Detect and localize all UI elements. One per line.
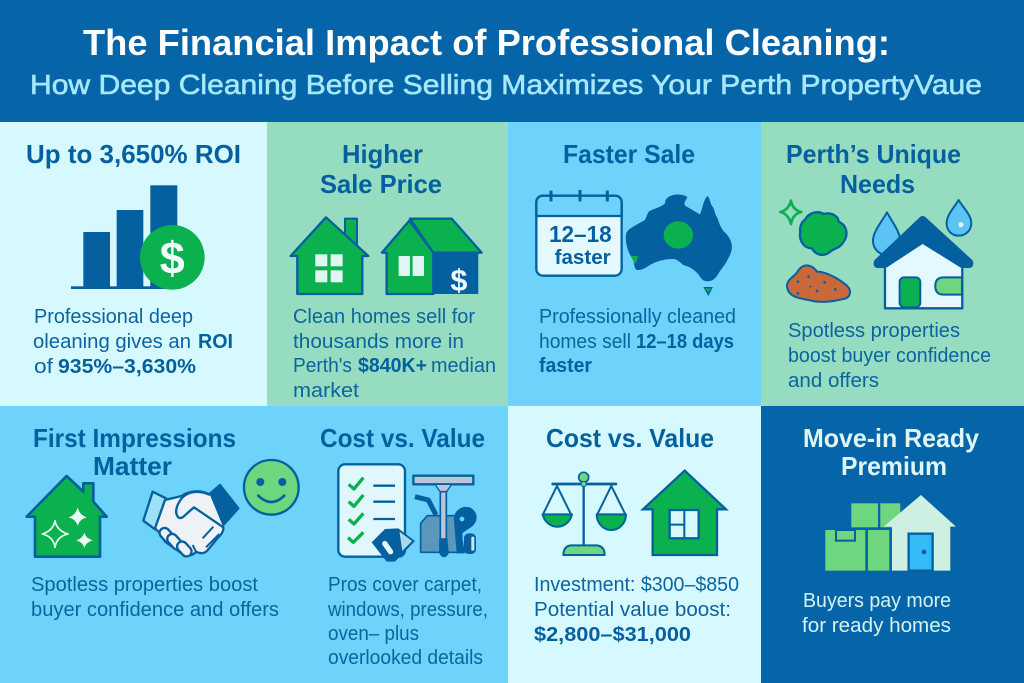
panel: ROI (0, 122, 267, 406)
panel: higher sale price (267, 122, 508, 406)
text: Perth's needs description (788, 320, 991, 392)
icon: checklist (338, 464, 415, 562)
text: faster sale description: 12–18 days (636, 331, 734, 353)
text: services description (327, 574, 488, 669)
heading: Perth's unique needs: Perth’s Unique (786, 139, 961, 169)
icon: bar chart with dollar coin (71, 185, 205, 290)
text: move-in description: Buyers pay more (803, 590, 951, 612)
icon: cleaning tools (413, 476, 476, 557)
panel: Perth's unique needs (761, 122, 1024, 406)
panel: faster sale (508, 122, 761, 406)
icon: sparkling green house (27, 476, 107, 557)
heading: Perth's unique needs (786, 139, 961, 199)
text: Perth's needs description: boost buyer confidence (788, 345, 991, 367)
heading: first impressions: Matter (93, 451, 172, 481)
text: ROI description (33, 306, 233, 378)
text: ROI description: 935%–3,630% (58, 356, 196, 378)
text: ROI description: of (34, 356, 53, 378)
text: services description: oven– plus (328, 623, 419, 645)
text: faster sale description (539, 306, 736, 377)
text: sale price description: median (431, 355, 496, 377)
text: investment description: $2,800–$31,000 (534, 624, 691, 646)
heading: Perth's unique needs: Needs (840, 169, 915, 199)
text: services description: overlooked details (328, 647, 483, 669)
text: sale price description: market (293, 380, 359, 402)
heading: cost vs value services: Cost vs. Value (320, 423, 485, 453)
icon: bar chart with dollar coin: $ (160, 232, 185, 283)
icon: house with water drops (873, 200, 971, 308)
text: investment description (534, 574, 739, 646)
header banner (0, 0, 1024, 122)
icon: handshake (143, 485, 238, 559)
text: first impressions description: Spotless properties boost (31, 574, 258, 596)
panel: cost vs value investment (508, 406, 761, 683)
heading: move-in ready premium: Move-in Ready (803, 423, 980, 453)
text: move-in description: for ready homes (802, 615, 951, 637)
icon: calendar (536, 190, 622, 276)
text: sale price description: $840K+ (358, 355, 427, 377)
icon: sparkle, bush and dirt pile (780, 201, 850, 302)
panel: first impressions and cost vs value (0, 406, 508, 683)
icon: two green houses (291, 217, 482, 298)
text: ROI description: ROI (198, 331, 233, 353)
text: services description: Pros cover carpet, (328, 574, 482, 596)
icon: two green houses: $ (450, 264, 467, 298)
text: sale price description: Clean homes sell for (293, 306, 475, 328)
text: move-in description (802, 590, 951, 637)
text: first impressions description: buyer confidence and offers (31, 599, 279, 621)
subtitle: How Deep Cleaning Before Selling Maximizes Your Perth PropertyVaue (30, 69, 982, 100)
text: faster sale description: homes sell (539, 331, 631, 353)
heading: higher sale price: Sale Price (320, 169, 442, 199)
heading: faster sale: Faster Sale (563, 139, 695, 169)
icon: balance scale (543, 472, 626, 555)
heading: cost vs value: Cost vs. Value (546, 423, 714, 453)
title: The Financial Impact of Professional Cleaning: (83, 22, 890, 63)
heading: higher sale price: Higher (342, 139, 423, 169)
text: first impressions description (31, 574, 279, 621)
text: faster sale description: Professionally cleaned (539, 306, 736, 328)
heading: move-in ready premium (803, 423, 980, 481)
text: investment description: Investment: $300–$850 (534, 574, 739, 596)
text: ROI description: Professional deep (34, 306, 193, 328)
icon: green house (643, 471, 726, 555)
text: Perth's needs description: and offers (788, 370, 879, 392)
text: ROI description: oleaning gives an (33, 331, 191, 353)
heading: first impressions (33, 423, 236, 481)
text: Perth's needs description: Spotless properties (788, 320, 960, 342)
text: services description: windows, pressure, (327, 599, 488, 621)
text: sale price description: Perth's (293, 355, 352, 377)
icon: smiley face (244, 460, 299, 515)
panel: move-in ready premium (761, 406, 1024, 683)
icon: calendar: faster (555, 246, 611, 269)
heading: move-in ready premium: Premium (841, 451, 947, 481)
text: faster sale description: faster (539, 355, 592, 377)
heading: higher sale price (320, 139, 442, 199)
text: sale price description: thousands more in (293, 331, 464, 353)
heading: first impressions: First Impressions (33, 423, 236, 453)
icon: calendar: 12–18 (549, 221, 612, 247)
icon: map of Australia (626, 194, 732, 296)
icon: moving boxes and house (825, 495, 956, 571)
heading: ROI: Up to 3,650% ROI (26, 139, 241, 169)
text: investment description: Potential value boost: (534, 599, 731, 621)
text: sale price description (293, 306, 496, 402)
